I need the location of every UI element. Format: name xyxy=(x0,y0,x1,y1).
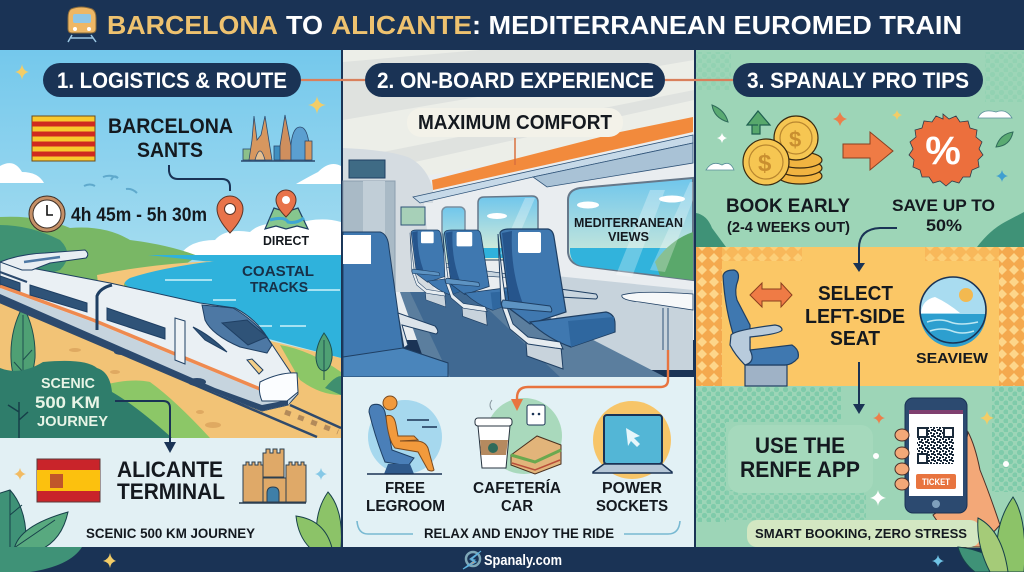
section pill xyxy=(43,63,301,97)
panel: logistics and route xyxy=(0,50,341,438)
railway track xyxy=(0,302,341,437)
legroom label xyxy=(366,480,445,515)
logo xyxy=(463,551,481,569)
journey caption: SCENIC 500 KM JOURNEY xyxy=(86,525,256,541)
clouds xyxy=(0,163,341,255)
arrow: scenic to alicante xyxy=(115,401,176,453)
icon: coins xyxy=(743,111,822,185)
footer sparkle xyxy=(103,553,116,568)
sockets label: SOCKETS xyxy=(596,498,668,515)
wall xyxy=(343,130,694,340)
footer sparkle xyxy=(932,555,944,567)
flag: catalonia xyxy=(32,116,95,161)
alicante label: ALICANTE xyxy=(117,457,223,482)
sparkles xyxy=(870,411,1009,506)
icon: legroom xyxy=(367,396,442,474)
sockets label: POWER xyxy=(602,480,662,497)
title xyxy=(107,10,962,40)
band: seat xyxy=(696,247,1024,386)
views label: VIEWS xyxy=(608,230,649,244)
stress caption: SMART BOOKING, ZERO STRESS xyxy=(755,526,967,541)
relax caption: RELAX AND ENJOY THE RIDE xyxy=(424,526,614,541)
icon: clock xyxy=(29,196,65,232)
front seat xyxy=(343,232,448,377)
badge: percent: % xyxy=(925,129,961,173)
book early label xyxy=(726,196,850,236)
book early label: BOOK EARLY xyxy=(726,196,850,217)
title: BARCELONA xyxy=(107,10,278,40)
panel: alicante xyxy=(0,438,341,550)
barcelona label xyxy=(108,115,233,162)
site name: Spanaly.com xyxy=(484,552,562,569)
arrow: table to cafeteria xyxy=(511,350,668,411)
save label xyxy=(892,196,995,235)
arrow: to app xyxy=(853,362,865,414)
sockets label xyxy=(596,480,668,515)
orange band xyxy=(432,117,693,190)
seaview label: SEAVIEW xyxy=(916,351,988,367)
icon: map xyxy=(265,190,308,229)
header bar xyxy=(0,0,1024,50)
window: large with sea view xyxy=(568,178,693,280)
cafeteria label: CAR xyxy=(501,498,533,515)
beach xyxy=(97,261,214,300)
title: TO xyxy=(286,10,323,40)
arrow: to seat xyxy=(853,228,897,272)
section pill xyxy=(365,63,665,97)
arrow: save xyxy=(843,132,893,170)
barcelona label: SANTS xyxy=(137,139,203,162)
leaves left xyxy=(0,490,68,550)
book early label: (2-4 WEEKS OUT) xyxy=(727,220,850,236)
icon: location pin xyxy=(217,196,243,233)
scenic label xyxy=(35,375,108,430)
section pill: 2. ON-BOARD EXPERIENCE xyxy=(377,68,654,93)
icon: laptop xyxy=(593,401,672,479)
tree xyxy=(11,306,35,395)
scenic label: SCENIC xyxy=(41,375,95,392)
coastal tracks label: TRACKS xyxy=(250,279,308,296)
comfort label: MAXIMUM COMFORT xyxy=(418,112,612,134)
window: medium xyxy=(478,196,538,260)
coin symbols: $ xyxy=(758,150,772,177)
icon: sea view xyxy=(920,277,986,347)
hills xyxy=(696,213,726,247)
decorations xyxy=(706,105,1013,182)
leaves right xyxy=(296,492,341,548)
alicante label xyxy=(117,457,225,504)
app label xyxy=(728,425,873,493)
arrow: seat direction xyxy=(750,283,792,307)
section pill: 1. LOGISTICS & ROUTE xyxy=(57,68,287,93)
scenic label: 500 KM xyxy=(35,393,100,412)
seat tip label: LEFT-SIDE xyxy=(805,306,905,328)
seats rows xyxy=(410,229,615,369)
footer leaves xyxy=(0,547,82,572)
sparkle xyxy=(15,64,29,80)
legroom label: FREE xyxy=(385,480,425,497)
section pill xyxy=(733,63,983,97)
app label: USE THE xyxy=(755,433,845,458)
coin symbols: $ xyxy=(789,127,801,152)
journey time: 4h 45m - 5h 30m xyxy=(71,205,207,226)
wave marks xyxy=(165,280,340,333)
icon: cafeteria xyxy=(475,398,562,474)
title: ALICANTE xyxy=(331,10,472,40)
coastal tracks label: COASTAL xyxy=(242,263,314,280)
icon: castle xyxy=(239,449,306,503)
hills xyxy=(83,233,145,250)
coin symbols xyxy=(758,127,801,177)
coastal tracks label xyxy=(242,263,314,296)
icon: train xyxy=(68,7,96,42)
views label: MEDITERRANEAN xyxy=(574,216,683,230)
dotted texture lower xyxy=(696,387,1024,522)
floor xyxy=(400,292,665,377)
seat tip label xyxy=(805,283,905,350)
app label: RENFE APP xyxy=(740,457,860,482)
ceiling xyxy=(343,50,694,200)
icon: skyline xyxy=(241,115,315,161)
views label xyxy=(574,216,683,244)
barcelona label: BARCELONA xyxy=(108,115,233,138)
alicante label: TERMINAL xyxy=(117,479,225,504)
panel: pro tips xyxy=(696,50,1024,572)
badge: percent xyxy=(909,114,983,186)
connector xyxy=(169,165,230,191)
branch xyxy=(8,402,28,438)
dotted texture xyxy=(696,52,731,90)
table xyxy=(622,292,693,375)
luggage rack xyxy=(413,135,693,203)
window: small xyxy=(442,207,465,267)
save label: 50% xyxy=(926,216,962,235)
legroom label: LEGROOM xyxy=(366,498,445,515)
icon: phone in hand xyxy=(895,398,1000,547)
cafeteria label: CAFETERÍA xyxy=(473,478,561,497)
direct label: DIRECT xyxy=(263,234,309,248)
seat tip label: SELECT xyxy=(818,283,893,305)
sea xyxy=(122,255,341,358)
sand xyxy=(0,296,341,438)
pointer xyxy=(514,138,516,165)
seat tip label: SEAT xyxy=(830,328,880,350)
lower wall xyxy=(556,276,693,370)
cafeteria label xyxy=(473,478,561,515)
title: : MEDITERRANEAN EUROMED TRAIN xyxy=(472,10,962,40)
stress caption xyxy=(747,520,980,547)
sparkle xyxy=(308,96,326,114)
bushes xyxy=(0,380,210,438)
leaves xyxy=(958,497,1024,572)
sparkles xyxy=(14,468,327,480)
left partition xyxy=(343,148,434,292)
icon: phone in hand: TICKET xyxy=(922,477,950,488)
flag: spain xyxy=(37,459,100,502)
birds xyxy=(84,176,137,193)
sand speckles xyxy=(69,348,221,428)
scenic label: JOURNEY xyxy=(37,413,108,430)
panel: on-board experience xyxy=(341,50,696,548)
footer bar xyxy=(0,547,958,572)
train xyxy=(0,250,298,411)
panel: amenities xyxy=(343,377,694,547)
connector lines xyxy=(301,79,733,81)
small tree xyxy=(316,333,332,380)
bracket lines xyxy=(357,521,680,534)
section pill: 3. SPANALY PRO TIPS xyxy=(747,68,969,93)
icon: seat xyxy=(723,270,798,386)
save label: SAVE UP TO xyxy=(892,196,995,215)
